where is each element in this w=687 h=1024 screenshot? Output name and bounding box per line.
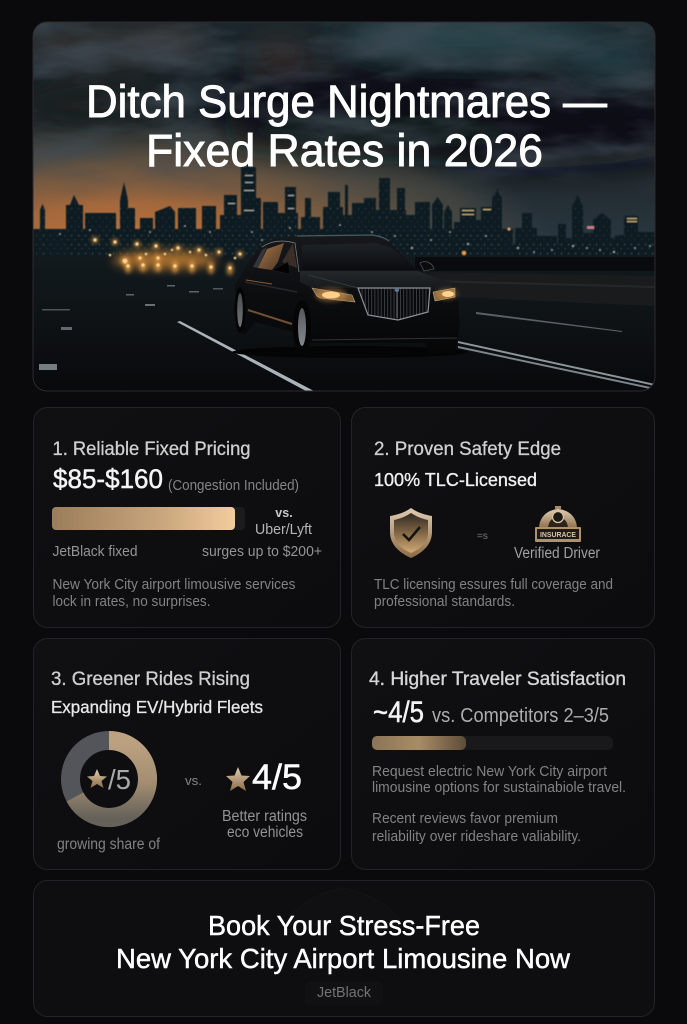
- growing share label: growing share of: [57, 836, 161, 853]
- price note: (Congestion Included): [168, 478, 299, 494]
- panel: hero image: [10, 20, 687, 391]
- city skyline: [33, 162, 655, 260]
- body text 2: TLC licensing essures full coverage and: [374, 577, 613, 593]
- satisfaction bar: [372, 736, 613, 750]
- donut chart: [70, 740, 148, 818]
- panel: 4 higher traveler satisfaction: [352, 638, 654, 870]
- body text 4a: Request electric New York City airport: [372, 764, 607, 780]
- body text 2: professional standards.: [374, 594, 515, 610]
- icon: shield: [390, 508, 432, 558]
- subheading 3: Expanding EV/Hybrid Fleets: [51, 697, 263, 717]
- donut chart: /5: [108, 764, 131, 795]
- icon: insurance badge: [535, 506, 581, 542]
- body text 4b: Recent reviews favor premium: [372, 811, 558, 827]
- panel: 3 greener rides rising: [34, 638, 340, 870]
- heading 3: 3. Greener Rides Rising: [51, 668, 250, 690]
- body text 1: New York City airport limousive services: [52, 577, 296, 593]
- cta heading: Book Your Stress-Free: [208, 910, 480, 941]
- title: [89, 84, 608, 167]
- title: Ditch Surge Nightmares —: [86, 76, 607, 127]
- vs uber lyft: Uber/Lyft: [255, 521, 313, 538]
- price: $85-$160: [53, 464, 163, 494]
- road: [33, 256, 655, 391]
- brand pill: JetBlack: [317, 985, 372, 1001]
- body text 1: [52, 577, 296, 610]
- panel: call to action: [34, 880, 654, 1016]
- body text 1: lock in rates, no surprises.: [52, 594, 210, 610]
- street lights: [92, 237, 243, 275]
- competitors: vs. Competitors 2–3/5: [432, 705, 609, 727]
- rating stat: ~4/5: [373, 696, 424, 729]
- panel: 2 proven safety edge: [352, 408, 654, 628]
- verified driver label: Verified Driver: [514, 545, 600, 562]
- rating 4/5: 4/5: [252, 758, 302, 797]
- brand pill: [305, 982, 383, 1005]
- panel: 1 reliable fixed pricing: [34, 408, 340, 628]
- bar label jetblack: JetBlack fixed: [52, 544, 138, 560]
- better ratings label: Better ratings: [222, 808, 307, 825]
- faint dome watermark: [285, 888, 402, 925]
- icon: insurance badge: INSURACE: [540, 530, 576, 539]
- body text 4b: reliability over rideshare valiability.: [372, 829, 581, 845]
- bar label surges: surges up to $200+: [202, 544, 322, 560]
- better ratings label: [222, 808, 307, 841]
- heading 2: 2. Proven Safety Edge: [374, 438, 561, 460]
- vs label: vs.: [185, 774, 202, 788]
- better ratings label: eco vehicles: [227, 824, 303, 841]
- vs uber lyft: vs.: [275, 506, 293, 520]
- rating 4/5: [226, 758, 302, 797]
- cta heading: [116, 910, 570, 974]
- body text 4a: [372, 764, 626, 796]
- icon: star small: [87, 769, 107, 788]
- heading 1: 1. Reliable Fixed Pricing: [52, 438, 250, 460]
- body text 4a: limousine options for sustainabiole travel.: [372, 780, 626, 796]
- sky: [34, 22, 654, 256]
- heading 4: 4. Higher Traveler Satisfaction: [369, 668, 626, 690]
- price bar: [52, 507, 245, 530]
- title: Fixed Rates in 2026: [146, 125, 543, 176]
- body text 4b: [372, 811, 581, 845]
- cta heading: New York City Airport Limousine Now: [116, 943, 570, 974]
- arrow symbol: =s: [477, 531, 488, 542]
- vs uber lyft: [255, 506, 313, 538]
- licensed stat: 100% TLC-Licensed: [374, 469, 537, 490]
- body text 2: [374, 577, 613, 610]
- black limousine car: [232, 235, 468, 358]
